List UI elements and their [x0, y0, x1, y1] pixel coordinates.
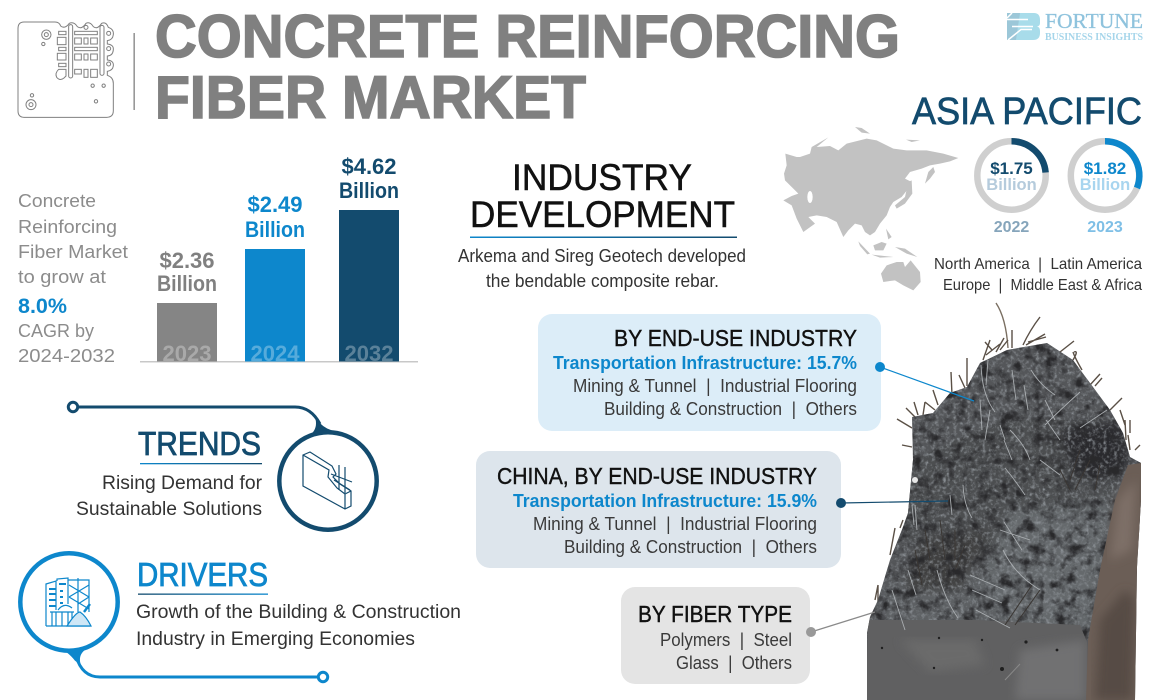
bar: 2023: $2.36	[159, 248, 215, 273]
block side face	[1086, 463, 1143, 700]
logo: Fortune Business Insights: BUSINESS INSIGHTS	[1045, 32, 1143, 43]
logo: Fortune Business Insights	[1007, 9, 1143, 43]
heading: Asia Pacific: ASIA PACIFIC	[912, 91, 1142, 133]
text: market growth: CAGR by	[18, 320, 95, 341]
panel: by end-use industry: Mining & Tunnel | Industrial Flooring	[573, 376, 857, 396]
icon: concrete beam with rebar	[279, 432, 377, 530]
panel: trends	[68, 402, 377, 530]
connector: drivers	[67, 651, 328, 682]
light fibers	[892, 360, 1107, 630]
pointer: by end-use industry	[875, 362, 974, 401]
title	[155, 3, 900, 131]
panel: china, by end-use industry: CHINA, BY END-USE INDUSTRY	[497, 463, 817, 489]
donut: 2023: Billion	[1080, 176, 1130, 194]
text: drivers	[136, 601, 461, 650]
title: CONCRETE REINFORCING	[155, 3, 900, 70]
image: concrete block with fibers	[860, 303, 1150, 700]
text: drivers: Industry in Emerging Economies	[136, 628, 415, 650]
text: market growth: Reinforcing	[18, 216, 117, 237]
pointer: by fiber type	[806, 612, 875, 637]
logo: Fortune Business Insights: FORTUNE	[1045, 9, 1143, 33]
panel: by fiber type: BY FIBER TYPE	[638, 601, 792, 627]
heading: drivers: DRIVERS	[137, 556, 268, 593]
donut: 2023	[1071, 141, 1139, 236]
dark fibers	[915, 450, 1100, 625]
bar: 2024: 2024	[251, 341, 300, 366]
bar: 2023	[157, 248, 217, 366]
text: market growth: 8.0%	[18, 295, 67, 318]
text: market growth: to grow at	[18, 266, 106, 287]
panel: drivers	[20, 553, 461, 682]
bar chart	[140, 154, 418, 366]
text: market growth: 2024-2032	[18, 345, 115, 366]
panel: china, by end-use industry	[476, 451, 841, 568]
text: other regions	[934, 256, 1142, 294]
text: drivers: Growth of the Building & Construction	[136, 601, 461, 623]
bar: 2032: Billion	[339, 178, 399, 203]
panel: by end-use industry	[538, 314, 881, 431]
text: industry development	[458, 246, 746, 291]
block base	[860, 340, 1150, 700]
bar: 2032: $4.62	[341, 154, 397, 179]
donut: 2023: $1.82	[1084, 159, 1126, 178]
panel: by fiber type: Glass | Others	[676, 653, 792, 673]
bar: 2023: 2023	[163, 341, 211, 366]
text: industry development: the bendable composite rebar.	[486, 271, 719, 291]
text: market growth: Concrete	[18, 190, 96, 211]
bar: 2032: 2032	[345, 341, 393, 366]
donut: 2022: Billion	[986, 176, 1037, 194]
text: trends: Sustainable Solutions	[76, 498, 262, 520]
pointer: china, by end-use industry	[836, 498, 948, 508]
donut: 2023: 2023	[1087, 219, 1123, 236]
bar: 2023: Billion	[157, 271, 217, 296]
panel: by end-use industry: Building & Construction | Others	[604, 399, 857, 419]
text: industry development: Arkema and Sireg Geotech developed	[458, 246, 746, 266]
heading: Industry Development	[470, 157, 737, 238]
panel: china, by end-use industry: Building & Construction | Others	[564, 537, 817, 557]
map: Asia Pacific	[783, 127, 958, 290]
block lower face	[866, 620, 1087, 700]
connector: trends	[68, 402, 332, 434]
fibers above the edge	[875, 303, 1140, 605]
text: market growth	[18, 190, 128, 366]
panel: china, by end-use industry: Transportation Infrastructure: 15.9%	[513, 491, 817, 511]
bar: 2024: Billion	[245, 217, 305, 242]
bar: 2024	[245, 192, 305, 366]
icon: buildings under construction	[20, 553, 118, 651]
donut: 2022	[977, 141, 1046, 236]
panel: by fiber type	[621, 587, 810, 684]
bar: 2024: $2.49	[247, 192, 303, 217]
panel: by fiber type: Polymers | Steel	[660, 630, 792, 650]
panel: by end-use industry: BY END-USE INDUSTRY	[614, 325, 857, 351]
divider	[134, 33, 135, 110]
title: FIBER MARKET	[155, 64, 586, 131]
panel: by end-use industry: Transportation Infrastructure: 15.7%	[553, 353, 857, 373]
text: other regions: Europe | Middle East & Africa	[943, 277, 1142, 294]
donut: 2022: $1.75	[990, 159, 1033, 178]
heading: Industry Development: DEVELOPMENT	[470, 194, 735, 235]
text: trends	[76, 472, 263, 520]
heading: trends: TRENDS	[138, 425, 261, 462]
icon: reinforced chip outline	[18, 22, 113, 117]
text: market growth: Fiber Market	[18, 241, 128, 262]
text: other regions: North America | Latin America	[934, 256, 1142, 273]
bar: 2032	[339, 154, 399, 366]
panel: china, by end-use industry: Mining & Tunnel | Industrial Flooring	[533, 514, 817, 534]
heading: Industry Development: INDUSTRY	[512, 157, 692, 198]
donut: 2022: 2022	[994, 219, 1029, 236]
text: trends: Rising Demand for	[102, 472, 263, 494]
